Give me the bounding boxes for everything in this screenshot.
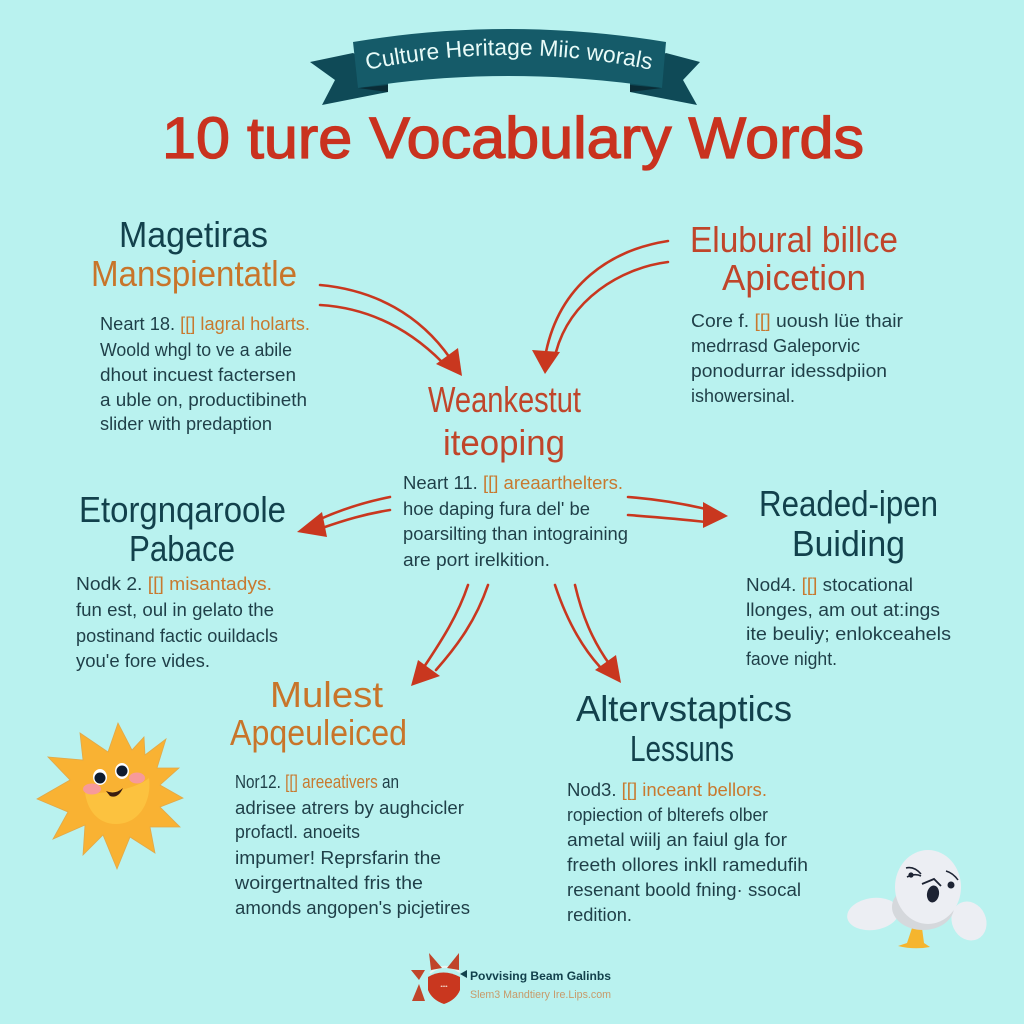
panel: lower right: resenant boold fning· ssocal xyxy=(567,880,801,900)
panel: top left: Woold whgl to ve a abile xyxy=(100,340,292,360)
footer text xyxy=(470,969,611,1001)
icon: smiling sun xyxy=(37,723,183,869)
panel: lower right: Nod3. [[] inceant bellors. xyxy=(567,780,767,800)
panel: lower left xyxy=(230,674,470,918)
arrow: top right to center xyxy=(532,241,668,374)
panel: center: Neart 11. [[] areaarthelters. xyxy=(403,473,623,493)
panel: center: hoe daping fura del' be xyxy=(403,499,590,519)
panel: middle left xyxy=(76,489,286,671)
panel: middle right: Buiding xyxy=(792,523,905,564)
panel: lower right: Lessuns xyxy=(630,728,734,769)
panel: lower right: Altervstaptics xyxy=(576,688,792,729)
panel: top right: Elubural billce xyxy=(690,219,898,260)
footer logo: shield emblem: •••• xyxy=(440,984,448,990)
footer logo: shield emblem xyxy=(411,953,467,1004)
panel: top right: ponodurrar idessdpiion xyxy=(691,361,887,381)
panel: middle left: you'e fore vides. xyxy=(76,651,210,671)
panel: middle left: Pabace xyxy=(129,528,235,569)
footer text: Slem3 Mandtiery Ire.Lips.com xyxy=(470,989,611,1001)
panel: top left: Manspientatle xyxy=(91,253,297,294)
panel: top left: dhout incuest factersen xyxy=(100,365,296,385)
panel: middle right: ite beuliy; enlokceahels xyxy=(746,624,951,644)
panel: lower left: profactl. anoeits xyxy=(235,822,360,842)
panel: top right: Apicetion xyxy=(722,257,866,298)
panel: lower right: freeth ollores inkll ramedufih xyxy=(567,855,808,875)
panel: top right: ishowersinal. xyxy=(691,386,795,406)
icon: white bird xyxy=(845,850,993,948)
panel: lower right xyxy=(567,688,808,925)
panel: middle right: Nod4. [[] stocational xyxy=(746,575,913,595)
arrow: center to lower right xyxy=(555,585,621,683)
banner ribbon: Culture Heritage Miic worals xyxy=(366,38,652,69)
panel: center: are port irelkition. xyxy=(403,550,550,570)
panel: lower left: Mulest xyxy=(270,674,383,715)
panel: middle left: fun est, oul in gelato the xyxy=(76,600,274,620)
panel: middle right: llonges, am out at:ings xyxy=(746,600,940,620)
panel: top right xyxy=(690,219,903,406)
panel: lower left: adrisee atrers by aughcicler xyxy=(235,798,464,818)
panel: lower left: Nor12. [[] areeativers an xyxy=(235,772,399,792)
panel: center: poarsilting than intograining xyxy=(403,524,628,544)
banner ribbon xyxy=(310,29,700,105)
panel: lower left: woirgertnalted fris the xyxy=(234,873,423,893)
panel: lower right: ametal wiilj an faiul gla for xyxy=(567,830,787,850)
panel: middle right: faove night. xyxy=(746,649,837,669)
panel: center: Weankestut xyxy=(428,379,581,420)
panel: lower left: impumer! Reprsfarin the xyxy=(235,848,441,868)
panel: lower right: ropiection of blterefs olber xyxy=(567,805,768,825)
arrow: center to lower left xyxy=(411,585,488,686)
panel: top left: Magetiras xyxy=(119,214,268,255)
panel: lower left: Apqeuleiced xyxy=(230,712,407,753)
panel: lower right: redition. xyxy=(567,905,632,925)
panel: top left: a uble on, productibineth xyxy=(100,390,307,410)
panel: middle right: Readed-ipen xyxy=(759,483,938,524)
panel: top right: medrrasd Galeporvic xyxy=(691,336,860,356)
panel: middle left: Nodk 2. [[] misantadys. xyxy=(76,574,272,594)
panel: center xyxy=(403,379,628,570)
title: 10 ture Vocabulary Words xyxy=(162,106,864,171)
panel: top left: Neart 18. [[] lagral holarts. xyxy=(100,314,310,334)
panel: center: iteoping xyxy=(443,422,565,463)
panel: top right: Core f. [[] uoush lüe thair xyxy=(691,311,903,331)
panel: middle right xyxy=(746,483,951,669)
arrow: center to middle right xyxy=(628,497,728,528)
arrow: top left to center xyxy=(320,285,462,376)
panel: middle left: postinand factic ouildacls xyxy=(76,626,278,646)
panel: top left xyxy=(91,214,310,434)
footer text: Povvising Beam Galinbs xyxy=(470,969,611,983)
arrow: center to middle left xyxy=(297,497,390,537)
panel: top left: slider with predaption xyxy=(100,414,272,434)
panel: middle left: Etorgnqaroole xyxy=(79,489,286,530)
panel: lower left: amonds angopen's picjetires xyxy=(235,898,470,918)
